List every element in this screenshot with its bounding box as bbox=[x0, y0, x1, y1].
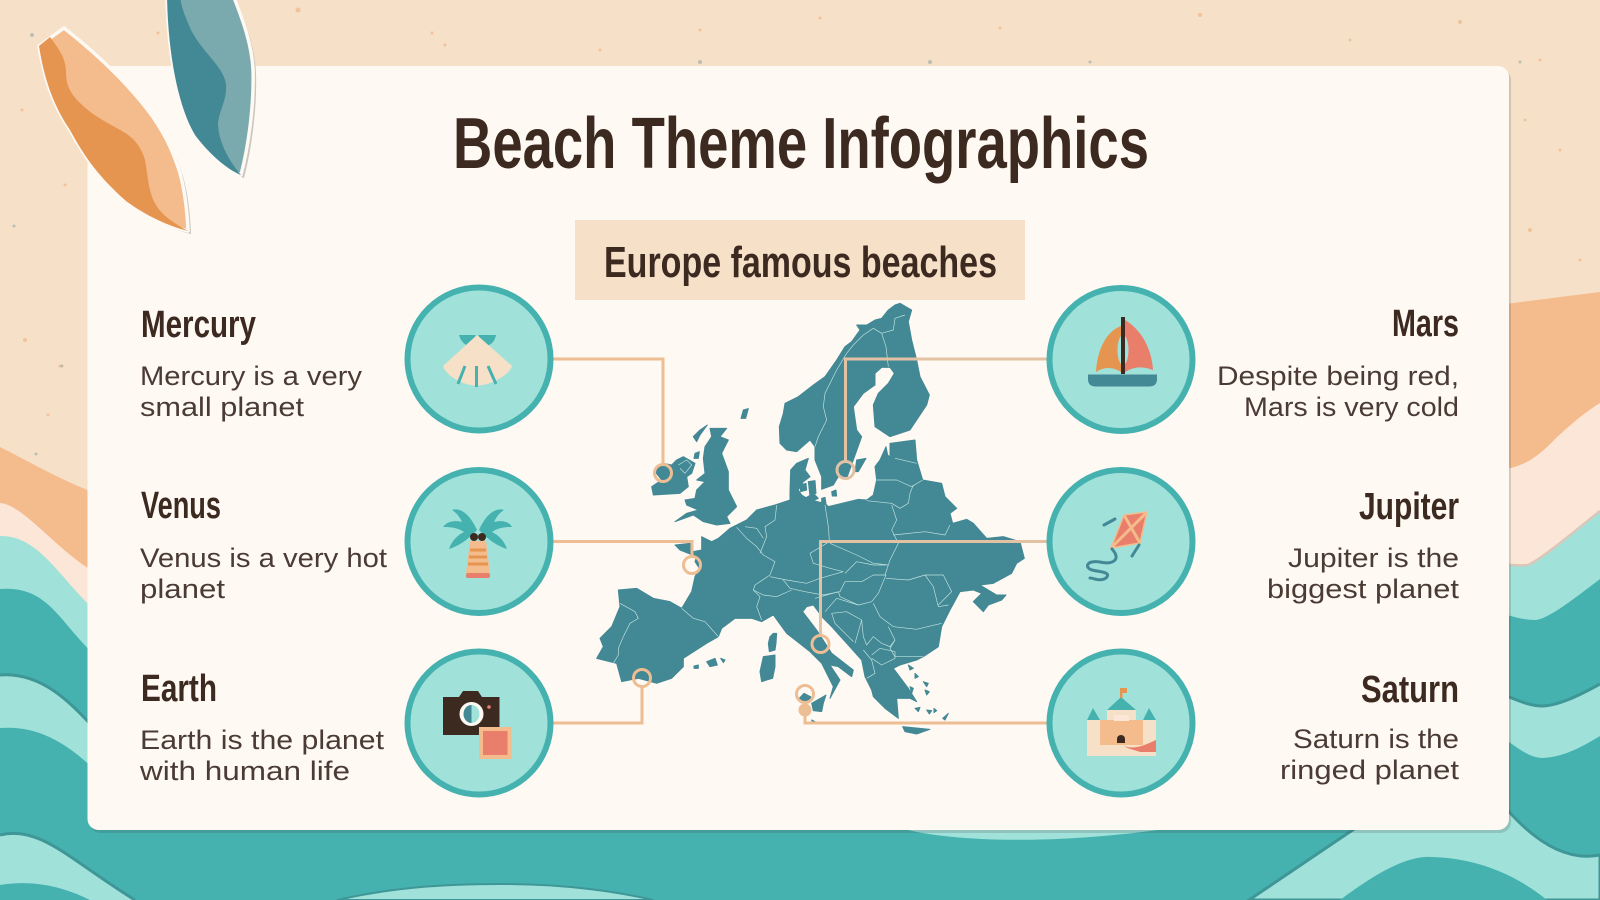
icon: sailboat bbox=[1050, 288, 1192, 431]
right bands bbox=[1490, 292, 1600, 500]
item: Mercury: small planet bbox=[140, 392, 305, 422]
item: Mercury: Mercury bbox=[141, 304, 256, 346]
item: Saturn: Saturn bbox=[1361, 669, 1459, 711]
item: Earth bbox=[139, 668, 385, 786]
title: Beach Theme Infographics bbox=[453, 104, 1149, 184]
surfboard: orange bbox=[39, 28, 191, 234]
item: Mars: Despite being red, bbox=[1217, 361, 1459, 391]
icon: sand castle bbox=[1050, 652, 1192, 794]
item: Mars bbox=[1217, 303, 1459, 422]
item: Venus: planet bbox=[140, 574, 226, 604]
item: Jupiter bbox=[1267, 486, 1460, 604]
panel: main card bbox=[88, 66, 1509, 830]
item: Earth: with human life bbox=[139, 756, 350, 786]
item: Jupiter: Jupiter bbox=[1359, 486, 1459, 528]
item: Venus: Venus bbox=[141, 485, 221, 527]
item: Saturn: Saturn is the bbox=[1293, 724, 1459, 754]
item: Earth: Earth bbox=[141, 668, 217, 710]
icon: shell bbox=[408, 288, 550, 430]
subtitle banner bbox=[575, 220, 1025, 300]
item: Mercury bbox=[140, 304, 363, 422]
item: Mars: Mars bbox=[1392, 303, 1459, 345]
item: Saturn: ringed planet bbox=[1280, 755, 1460, 785]
icon: palm tree bbox=[408, 470, 550, 613]
icon: kite bbox=[1050, 470, 1192, 613]
item: Mercury: Mercury is a very bbox=[140, 361, 363, 391]
left bands bbox=[0, 447, 100, 600]
map of Europe bbox=[597, 303, 1024, 734]
connector lines and map pins bbox=[553, 359, 1047, 723]
item: Venus bbox=[140, 485, 388, 604]
item: Jupiter: biggest planet bbox=[1267, 574, 1460, 604]
icon: camera bbox=[408, 652, 550, 794]
item: Mars: Mars is very cold bbox=[1244, 392, 1459, 422]
item: Earth: Earth is the planet bbox=[140, 725, 385, 755]
surfboard: teal bbox=[167, 0, 256, 178]
subtitle banner: Europe famous beaches bbox=[604, 238, 997, 287]
bottom shapes bbox=[337, 884, 653, 900]
item: Venus: Venus is a very hot bbox=[140, 543, 388, 573]
item: Saturn bbox=[1280, 669, 1460, 785]
item: Jupiter: Jupiter is the bbox=[1288, 543, 1459, 573]
